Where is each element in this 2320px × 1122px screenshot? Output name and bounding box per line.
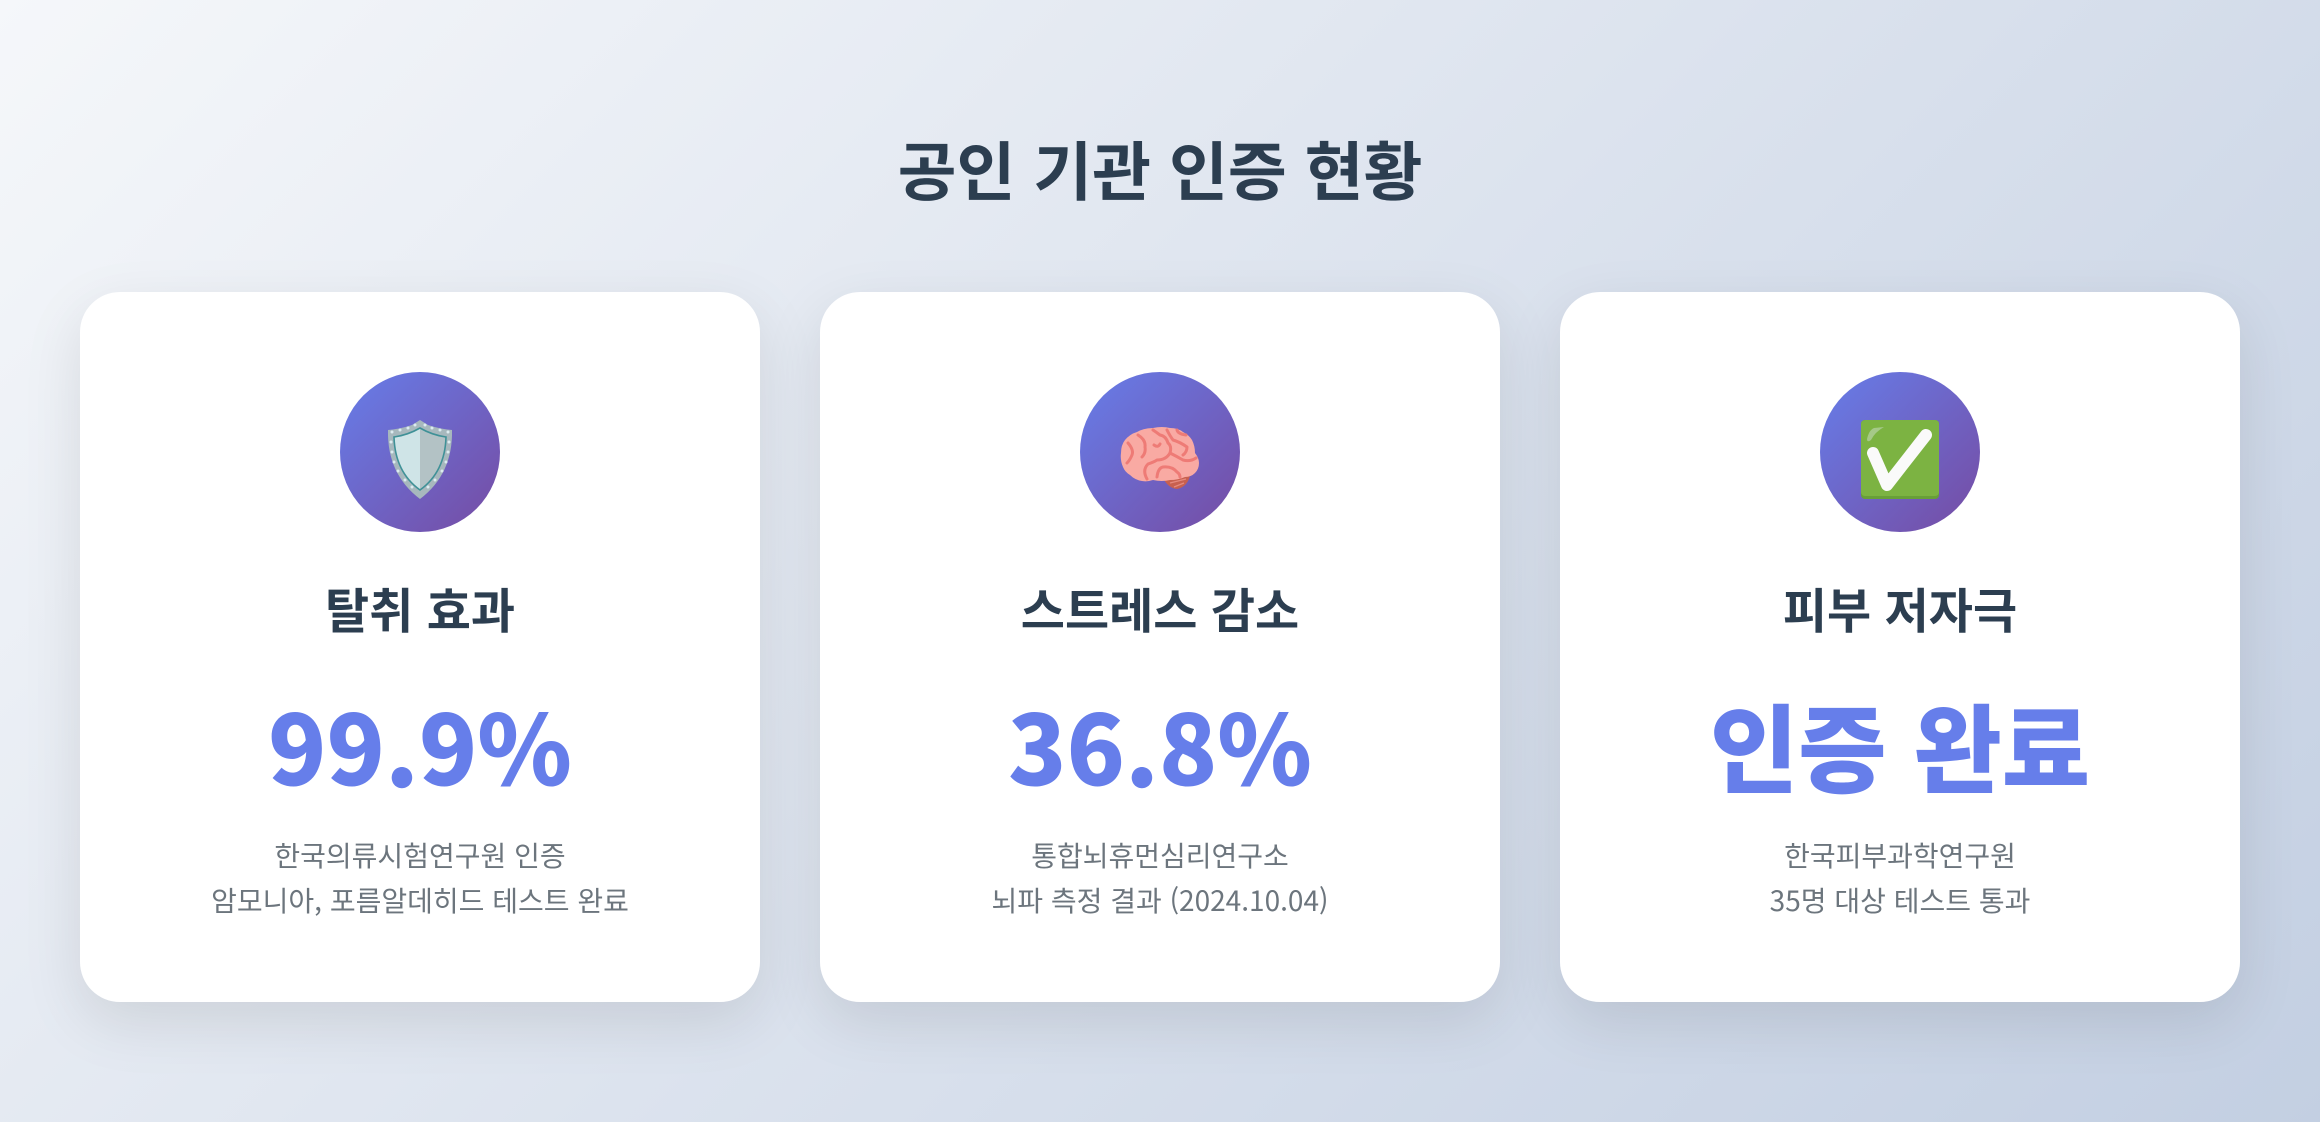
card heading: 스트레스 감소 [1021, 572, 1299, 642]
description: 통합뇌휴먼심리연구소 [1031, 835, 1289, 875]
title: 공인 기관 인증 현황 [898, 122, 1422, 214]
panel: stress reduction [820, 292, 1500, 1002]
description: 한국피부과학연구원 [1784, 835, 2016, 875]
big number: 99.9% [268, 674, 572, 813]
big number: 36.8% [1008, 674, 1312, 813]
description: 암모니아, 포름알데히드 테스트 완료 [211, 880, 629, 920]
big number: 인증 완료 [1710, 674, 2090, 813]
description: 한국의류시험연구원 인증 [274, 835, 566, 875]
icon: brain [1080, 372, 1240, 532]
description: 35명 대상 테스트 통과 [1770, 880, 2030, 920]
icon: shield [340, 372, 500, 532]
card heading: 탈취 효과 [325, 572, 515, 642]
description [992, 835, 1328, 920]
panel: deodorizing effect [80, 292, 760, 1002]
description [1770, 835, 2030, 920]
card heading: 피부 저자극 [1783, 572, 2017, 642]
icon: check mark [1820, 372, 1980, 532]
panel: low skin irritation [1560, 292, 2240, 1002]
description: 뇌파 측정 결과 (2024.10.04) [992, 880, 1328, 920]
description [211, 835, 629, 920]
